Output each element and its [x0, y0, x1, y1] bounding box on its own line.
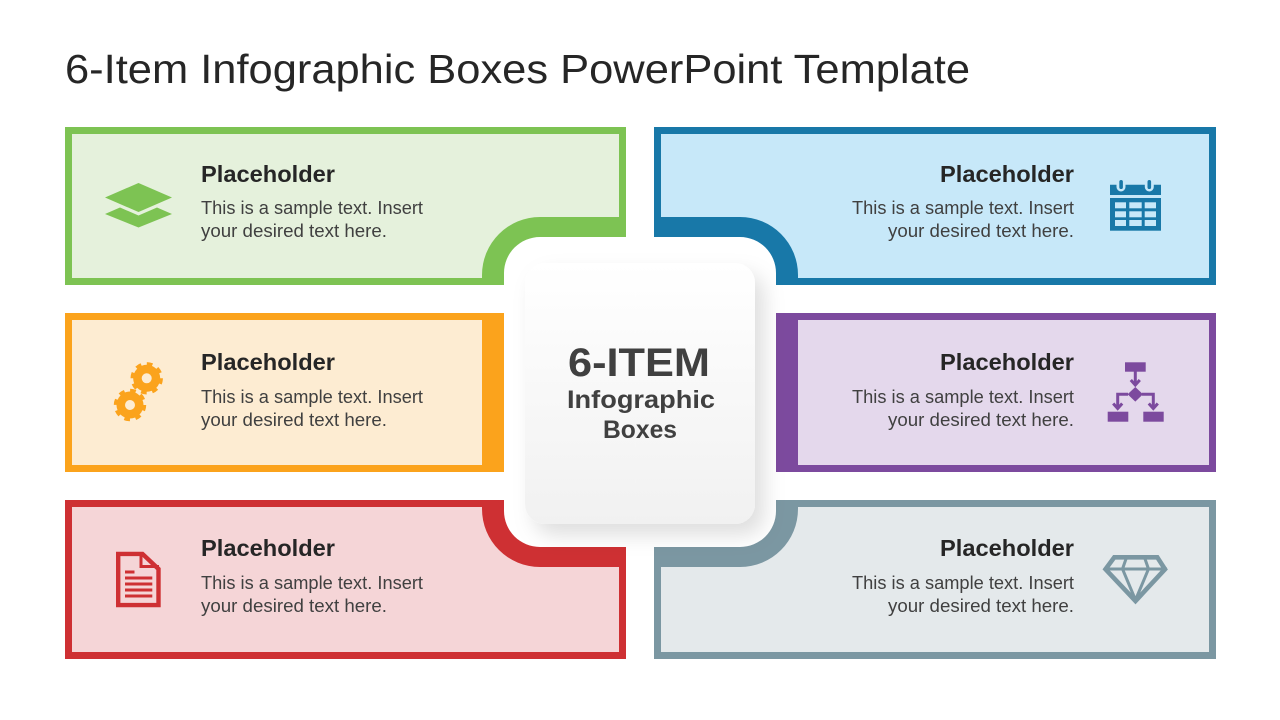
center card: [525, 263, 755, 524]
text: orange panel: [201, 349, 423, 430]
panel: green top left: [65, 127, 626, 285]
text: purple panel: Placeholder: [940, 349, 1074, 375]
panel: red bottom left: [65, 500, 626, 659]
text: gray panel: This is a sample text. Insert: [852, 573, 1074, 593]
icon: gears: [116, 364, 161, 420]
text: red panel: This is a sample text. Insert: [201, 573, 423, 593]
text: orange panel: This is a sample text. Insert: [201, 387, 423, 407]
icon: document: [118, 553, 159, 605]
center heading: 6-ITEM: [568, 341, 710, 385]
text: green panel: [201, 161, 423, 241]
panel: orange middle left: [65, 313, 504, 472]
panel: gray bottom right: [654, 500, 1216, 659]
text: purple panel: your desired text here.: [888, 410, 1074, 430]
text: gray panel: Placeholder: [940, 535, 1074, 561]
text: red panel: your desired text here.: [201, 596, 387, 616]
text: green panel: This is a sample text. Insert: [201, 198, 423, 218]
text: blue panel: your desired text here.: [888, 221, 1074, 241]
panel: purple middle right: [776, 313, 1216, 472]
text: green panel: your desired text here.: [201, 221, 387, 241]
text: red panel: [201, 535, 423, 616]
text: orange panel: Placeholder: [201, 349, 335, 375]
text: red panel: Placeholder: [201, 535, 335, 561]
icon: flowchart: [1108, 362, 1164, 422]
title: 6-Item Infographic Boxes PowerPoint Template: [65, 46, 970, 92]
icon: layers: [105, 183, 172, 228]
text: gray panel: your desired text here.: [888, 596, 1074, 616]
text: orange panel: your desired text here.: [201, 410, 387, 430]
text: purple panel: This is a sample text. Insert: [852, 387, 1074, 407]
icon: diamond: [1104, 556, 1167, 601]
text: green panel: Placeholder: [201, 161, 335, 187]
text: blue panel: Placeholder: [940, 161, 1074, 187]
text: blue panel: This is a sample text. Insert: [852, 198, 1074, 218]
text: blue panel: [852, 161, 1074, 241]
center subheading: Boxes: [603, 416, 677, 444]
icon: calendar: [1110, 180, 1161, 231]
center subheading: Infographic: [567, 386, 715, 414]
center subheading: [567, 386, 715, 444]
text: gray panel: [852, 535, 1074, 616]
panel: blue top right: [654, 127, 1216, 285]
text: purple panel: [852, 349, 1074, 430]
